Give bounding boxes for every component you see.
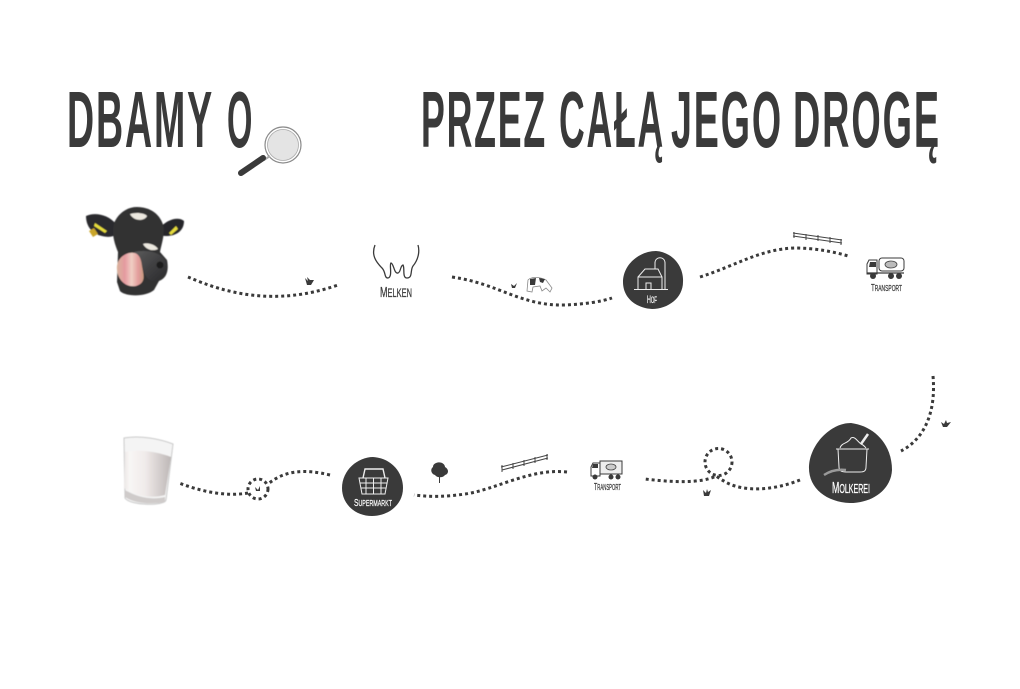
badge: farm: [623, 251, 683, 309]
icon: milk tanker truck with label: [867, 258, 904, 294]
icon: tree: [431, 462, 448, 483]
icon: grazing cow: [527, 277, 552, 292]
icon: fence: [793, 232, 842, 245]
title: right part: [421, 75, 941, 164]
badge: supermarket: SUPERMARKT: [354, 498, 392, 509]
badge: dairy: [809, 423, 892, 503]
badge: supermarket: [342, 457, 403, 516]
title: right part: CAŁĄ: [559, 75, 665, 164]
dotted route: farm to transport: [700, 248, 848, 277]
icon: grass tuft: [703, 489, 711, 496]
icon: shopping basket: [359, 469, 388, 494]
icon: udder with label Melken: [374, 245, 419, 301]
icon: magnifying glass: [241, 127, 301, 173]
icon: barn and silo: [634, 258, 668, 290]
icon: milk tanker truck with label: TRANSPORT: [871, 282, 902, 294]
dotted route: cow to milking: [188, 277, 338, 296]
badge: dairy: MOLKEREI: [832, 480, 870, 497]
icon: yogurt pot with spoon: [824, 434, 869, 475]
dotted route: transport to supermarket: [414, 472, 567, 496]
icon: grass tuft: [255, 486, 260, 491]
title: left part: DBAMY: [67, 75, 214, 164]
dotted route: supermarket to milk glass with loop: [179, 472, 330, 499]
title: right part: JEGO: [671, 75, 783, 164]
dotted route: dairy to second transport with loop: [645, 448, 800, 489]
glass of milk: [124, 437, 173, 504]
icon: milk tanker truck with label: [591, 461, 622, 493]
icon: udder with label Melken: MELKEN: [380, 285, 412, 301]
infographic canvas: O: [227, 75, 254, 164]
cow head licking its nose: [86, 207, 184, 295]
icon: fence: [501, 454, 548, 472]
title: right part: PRZEZ: [421, 75, 547, 164]
title: left part: [67, 75, 254, 164]
icon: grass tuft: [941, 420, 951, 427]
dotted route: milking to farm: [452, 277, 612, 305]
badge: farm: HOF: [647, 294, 657, 306]
dotted route: transport to dairy: [901, 376, 934, 451]
icon: grass tuft: [511, 283, 517, 288]
icon: grass tuft: [305, 277, 314, 285]
icon: milk tanker truck with label: TRANSPORT: [594, 482, 621, 493]
